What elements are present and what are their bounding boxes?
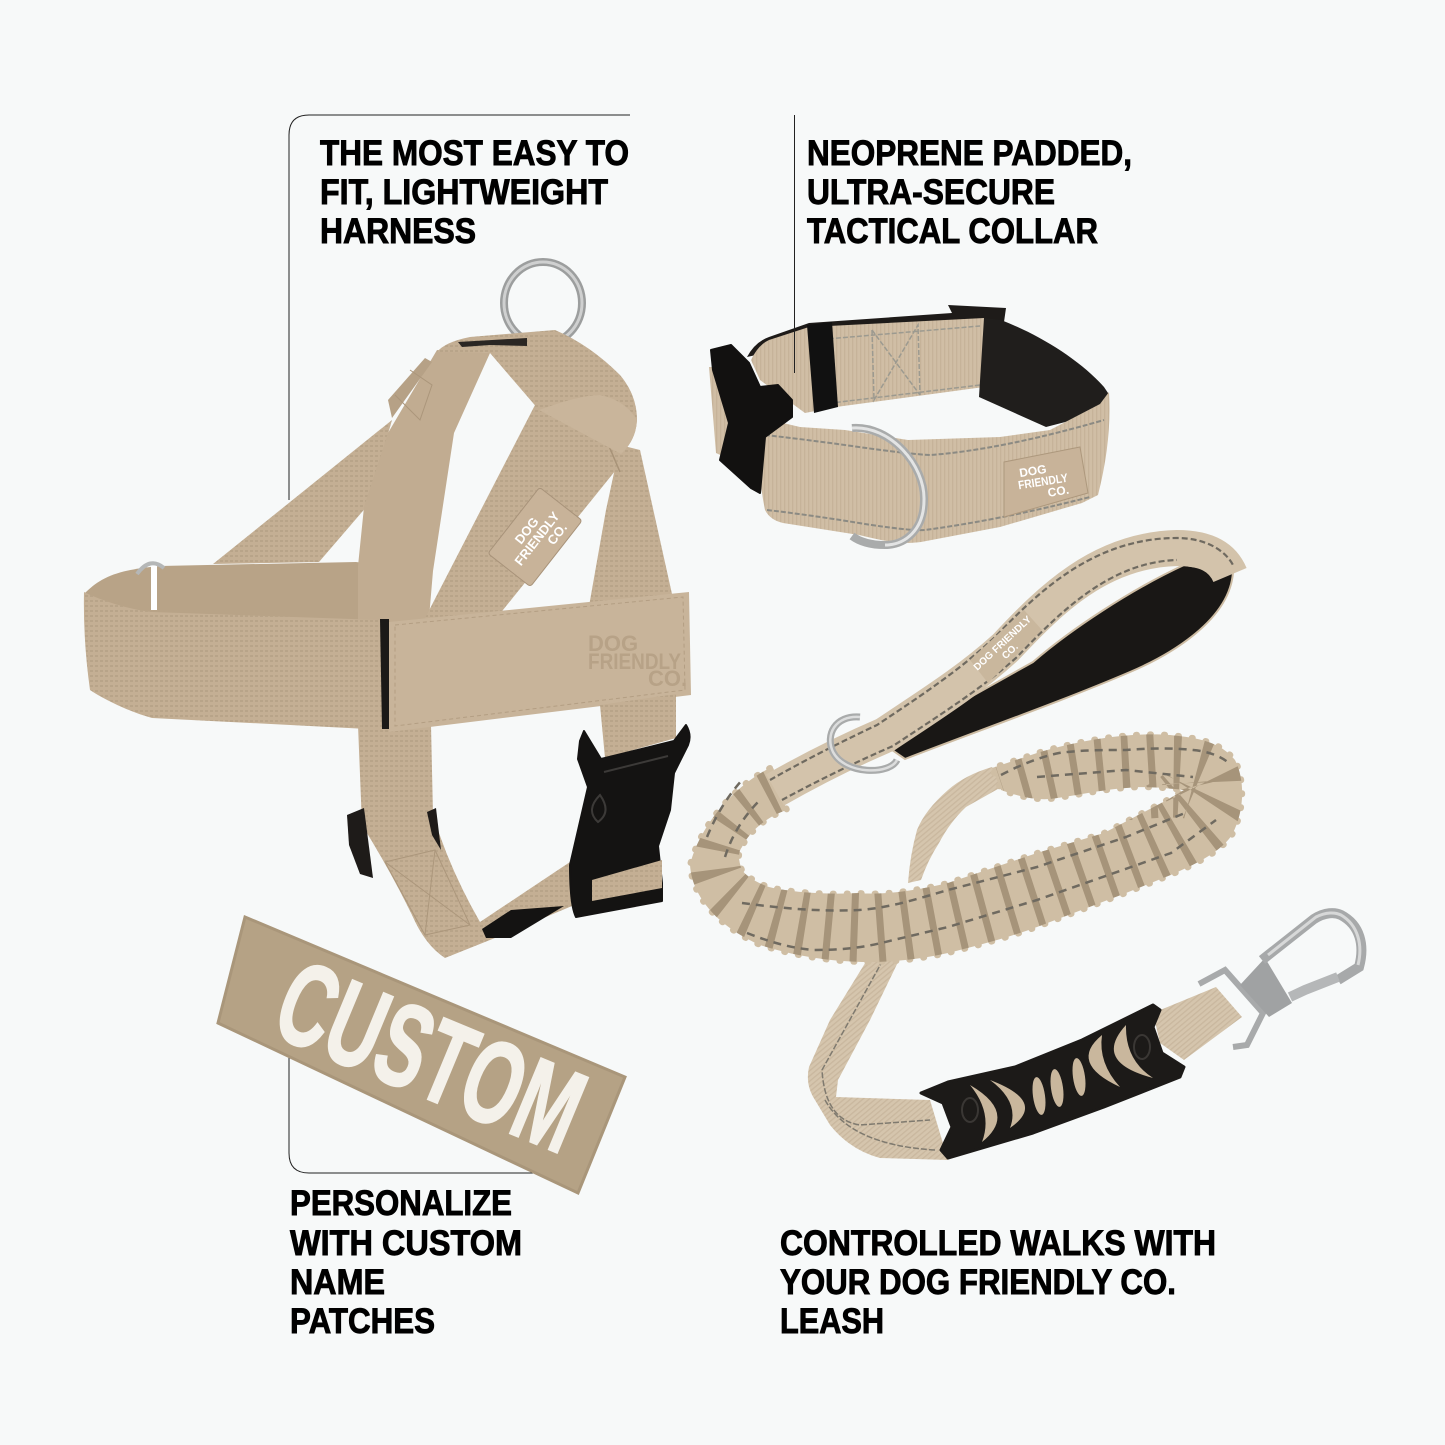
leather logo: DOG	[588, 631, 638, 656]
diagonal strap	[213, 420, 392, 564]
buckle slots	[592, 756, 668, 822]
heading: harness: THE MOST EASY TO	[320, 134, 629, 173]
neoprene lining	[979, 318, 1108, 427]
heading: leash: YOUR DOG FRIENDLY CO.	[780, 1263, 1176, 1302]
heading: leash	[780, 1224, 1216, 1341]
bungee section	[690, 734, 1242, 962]
black grip	[921, 1005, 1184, 1158]
collar left tab	[709, 367, 731, 460]
callout line: patch	[289, 1050, 540, 1173]
leash logo patch: CO.	[1000, 642, 1021, 662]
black strap	[807, 322, 838, 413]
yoke lining	[458, 338, 527, 347]
harness D-ring	[504, 262, 582, 344]
leash ring	[830, 717, 897, 770]
harness logo patch: DOG	[512, 514, 542, 547]
velcro	[380, 619, 390, 729]
collar logo patch: DOG	[1018, 462, 1047, 480]
heading: harness: HARNESS	[320, 212, 476, 251]
collar inside	[751, 318, 984, 413]
heading: leash: CONTROLLED WALKS WITH	[780, 1224, 1216, 1263]
heading: patches: NAME	[290, 1263, 385, 1302]
heading: patches: WITH CUSTOM	[290, 1224, 522, 1263]
handle lining	[885, 565, 1233, 759]
grip ovals	[962, 1035, 1150, 1122]
bungee ribs	[715, 758, 1222, 927]
harness logo patch	[488, 487, 582, 587]
heading: patches: PERSONALIZE	[290, 1184, 512, 1223]
small ring	[137, 563, 164, 574]
harness	[84, 262, 691, 958]
heading: collar	[807, 134, 1132, 251]
hook gate	[1290, 977, 1338, 997]
tip strap	[1153, 987, 1242, 1060]
callout line: harness	[289, 115, 630, 500]
left shoulder strap	[358, 350, 490, 630]
flat strap upper	[908, 767, 1005, 883]
leash logo patch: DOG FRIENDLY	[972, 614, 1034, 673]
heading: collar: TACTICAL COLLAR	[807, 212, 1098, 251]
patch text: CUSTOM	[258, 935, 602, 1179]
collar buckle	[711, 345, 792, 493]
triglide	[347, 808, 441, 878]
bungee stitching	[707, 748, 1229, 950]
strap tip	[482, 906, 564, 938]
heading: patches	[290, 1184, 522, 1341]
heading: leash: LEASH	[780, 1302, 884, 1341]
collar black edge	[747, 305, 1006, 357]
yoke	[437, 330, 637, 454]
lower strap stitching	[385, 850, 470, 935]
metal link	[1199, 970, 1263, 1047]
swivel body	[1240, 958, 1292, 1017]
inner band	[84, 562, 429, 630]
leather logo: CO.	[648, 666, 687, 691]
band stitching	[765, 420, 1104, 530]
side release buckle	[570, 725, 690, 917]
heading: harness: FIT, LIGHTWEIGHT	[320, 173, 608, 212]
leather logo	[588, 631, 687, 691]
handle stitching	[770, 538, 1233, 800]
harness logo patch: FRIENDLY	[511, 509, 563, 568]
flat strap lower	[808, 960, 948, 1160]
leash	[690, 538, 1361, 1160]
waist band	[84, 592, 388, 730]
yoke fold	[539, 395, 637, 454]
snap hook	[1262, 913, 1361, 980]
rear strap	[588, 445, 676, 612]
front strap	[421, 405, 628, 626]
bungee body	[690, 734, 1242, 962]
heading: collar: NEOPRENE PADDED,	[807, 134, 1132, 173]
collar	[709, 305, 1110, 545]
patch body	[218, 917, 625, 1193]
grip holes	[970, 1025, 1153, 1142]
collar D-ring	[852, 428, 924, 545]
heading: harness	[320, 134, 629, 251]
handle webbing	[775, 548, 1230, 790]
adjuster strap	[592, 860, 662, 901]
heading: patches: PATCHES	[290, 1302, 435, 1341]
collar logo patch: CO.	[1047, 483, 1070, 500]
leash logo patch	[970, 610, 1042, 683]
harness logo patch: CO.	[544, 520, 570, 548]
leather panel	[389, 592, 691, 732]
stitch on shoulder	[395, 370, 432, 420]
callout line: collar	[794, 115, 796, 373]
leather logo: FRIENDLY	[588, 649, 681, 674]
heading: collar: ULTRA-SECURE	[807, 173, 1055, 212]
collar stitching	[815, 325, 980, 405]
lower centre strap	[358, 725, 572, 958]
collar logo patch: FRIENDLY	[1017, 471, 1069, 492]
collar band	[758, 392, 1110, 543]
strap above buckle	[600, 694, 676, 758]
custom name patch	[218, 917, 625, 1193]
collar logo patch	[1004, 447, 1088, 517]
